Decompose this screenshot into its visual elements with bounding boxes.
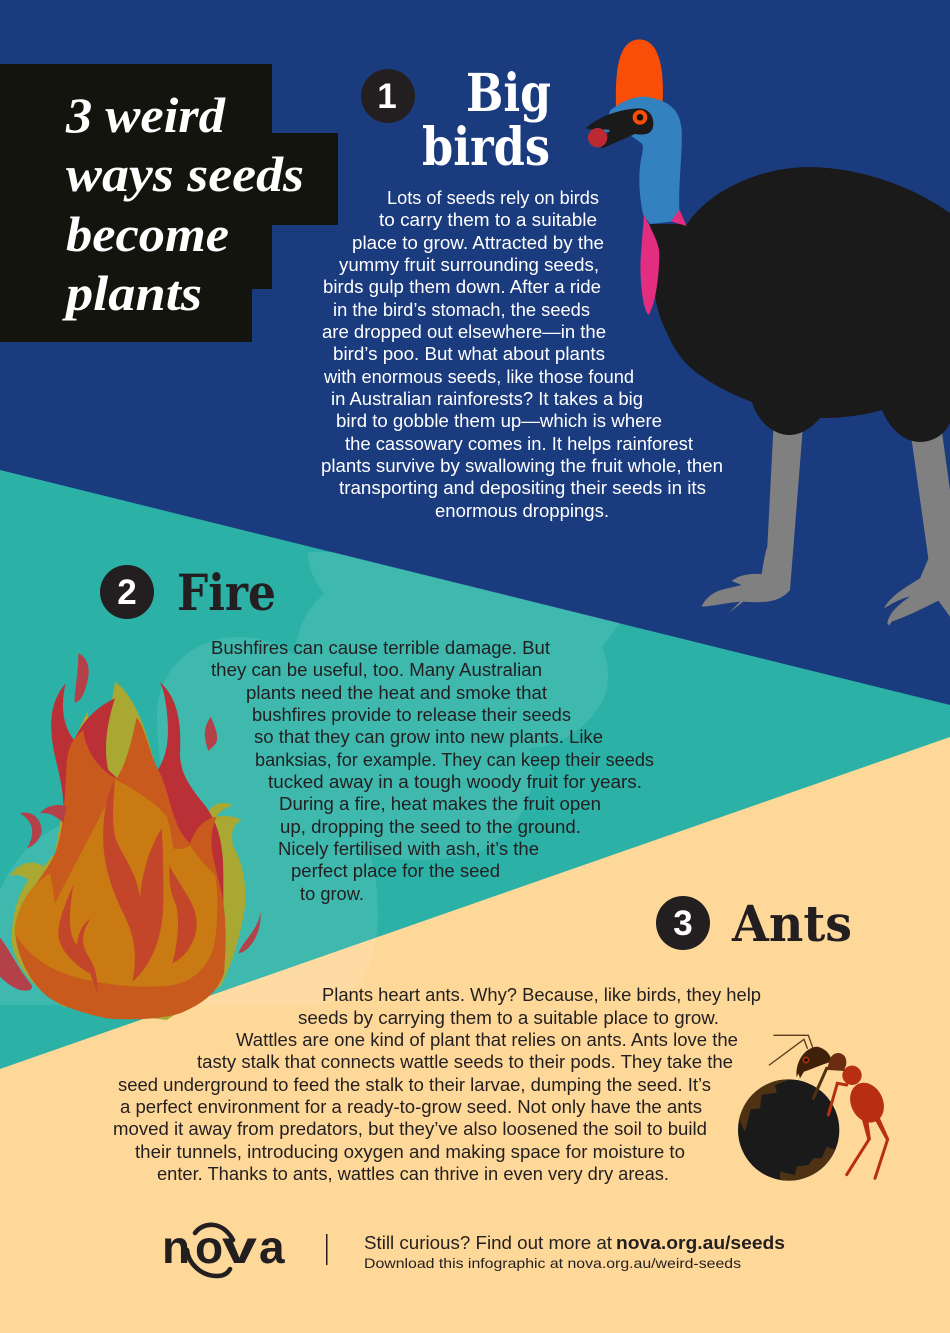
illustration: flames: [0, 653, 261, 1020]
section 1 body text: the cassowary comes in. It helps rainforest: [345, 434, 693, 454]
section 1 body text: to carry them to a suitable: [379, 210, 597, 230]
flame body: [15, 717, 226, 1019]
section 1 body text: yummy fruit surrounding seeds,: [339, 255, 599, 275]
section 2 body text: perfect place for the seed: [291, 861, 500, 881]
nova logo: a: [259, 1221, 285, 1273]
section 1 body text: birds gulp them down. After a ride: [323, 277, 601, 297]
cream lower panel: [0, 737, 950, 1333]
section 2 body text: tucked away in a tough woody fruit for years.: [268, 772, 642, 792]
illustration: ant pushing seed: [737, 1035, 890, 1183]
ant head: [796, 1047, 832, 1078]
nova logo: n: [162, 1221, 190, 1273]
section 2 body text: [211, 638, 654, 904]
section 1 number badge: 1: [377, 77, 397, 116]
section 3 body text: tasty stalk that connects wattle seeds to their pods. They take the: [197, 1052, 733, 1072]
ant legs and antennae: [769, 1035, 888, 1178]
title text: 3 weird: [65, 87, 226, 143]
bird body: [650, 167, 950, 442]
golden core: [15, 779, 217, 987]
section 1 body text: Lots of seeds rely on birds: [387, 188, 599, 208]
nova logo: [162, 1221, 285, 1276]
section 1 body text: bird’s poo. But what about plants: [333, 344, 605, 364]
section 3 number badge: [656, 896, 710, 950]
ant abdomen: [844, 1077, 890, 1128]
section 1 heading: birds: [422, 117, 550, 178]
ant upper hind legs: [861, 1115, 889, 1141]
section 3 body text: seed underground to feed the stalk to their larvae, dumping the seed. It’s: [118, 1075, 711, 1095]
section 3 body text: enter. Thanks to ants, wattles can thrive in even very dry areas.: [157, 1164, 669, 1184]
section 3 body text: their tunnels, introducing oxygen and making space for moisture to: [135, 1142, 685, 1162]
centre tip: [117, 717, 157, 778]
section 3 body text: seeds by carrying them to a suitable place to grow.: [298, 1008, 719, 1028]
title block: [0, 64, 338, 342]
section 1 body text: enormous droppings.: [435, 501, 609, 521]
section 3 body text: Wattles are one kind of plant that relies on ants. Ants love the: [236, 1030, 738, 1050]
section 2 body text: plants need the heat and smoke that: [246, 683, 547, 703]
section 2 heading: Fire: [177, 563, 276, 622]
smoke cloud: [0, 552, 620, 1005]
footer call to action: nova.org.au/seeds: [616, 1233, 785, 1253]
title text: ways seeds: [66, 146, 304, 202]
section 2 body text: up, dropping the seed to the ground.: [280, 817, 581, 837]
section 2 body text: bushfires provide to release their seeds: [252, 705, 571, 725]
section 1 heading: [422, 63, 551, 178]
section 2 body text: banksias, for example. They can keep their seeds: [255, 750, 654, 770]
nova logo: v: [222, 1221, 258, 1273]
footer download line: Download this infographic at nova.org.au/weird-seeds: [364, 1255, 741, 1271]
section 2 body text: to grow.: [300, 884, 364, 904]
section 3 body text: Plants heart ants. Why? Because, like birds, they help: [322, 985, 761, 1005]
section 2 body text: they can be useful, too. Many Australian: [211, 660, 542, 680]
section 1 body text: in the bird’s stomach, the seeds: [333, 300, 590, 320]
title text: [62, 87, 304, 321]
section 1 body text: in Australian rainforests? It takes a big: [331, 389, 643, 409]
section 1 heading: Big: [466, 63, 551, 124]
footer call to action: Still curious? Find out more at: [364, 1233, 612, 1253]
dark flame tongues: [103, 780, 163, 982]
back red flame: [33, 682, 223, 973]
section 1 body text: place to grow. Attracted by the: [352, 233, 604, 253]
section 3 heading: Ants: [731, 894, 852, 953]
section 2 number badge: 2: [117, 573, 137, 612]
section 1 body text: with enormous seeds, like those found: [323, 367, 634, 387]
bird legs: [702, 430, 950, 626]
bird head: [586, 39, 687, 315]
title text: become: [66, 206, 229, 262]
section 2 body text: Nicely fertilised with ash, it’s the: [278, 839, 539, 859]
section 2 body text: Bushfires can cause terrible damage. But: [211, 638, 550, 658]
back yellow flame: [10, 682, 245, 1020]
section 3 number badge: 3: [673, 904, 693, 943]
section 1 body text: plants survive by swallowing the fruit whole, then: [321, 456, 723, 476]
section 2 number badge: [100, 565, 154, 619]
section 2 body text: so that they can grow into new plants. Like: [254, 727, 603, 747]
nova logo: o: [195, 1221, 223, 1273]
section 2 body text: During a fire, heat makes the fruit open: [279, 794, 601, 814]
ant thorax: [827, 1053, 846, 1070]
teal diagonal band: [0, 470, 950, 1333]
section 3 body text: a perfect environment for a ready-to-grow seed. Not only have the ants: [120, 1097, 702, 1117]
section 3 body text: [113, 985, 761, 1184]
flying embers: [0, 653, 261, 991]
section 1 body text: transporting and depositing their seeds in its: [339, 478, 706, 498]
section 1 body text: are dropped out elsewhere—in the: [322, 322, 606, 342]
section 3 body text: moved it away from predators, but they’ve also loosened the soil to build: [113, 1119, 707, 1139]
seed: [738, 1079, 839, 1181]
section 1 number badge: [361, 69, 415, 123]
section 1 body text: [321, 188, 723, 521]
title text: plants: [62, 265, 202, 321]
section 1 body text: bird to gobble them up—which is where: [336, 411, 662, 431]
illustration: cassowary: [586, 39, 950, 626]
footer divider: [326, 1234, 328, 1265]
